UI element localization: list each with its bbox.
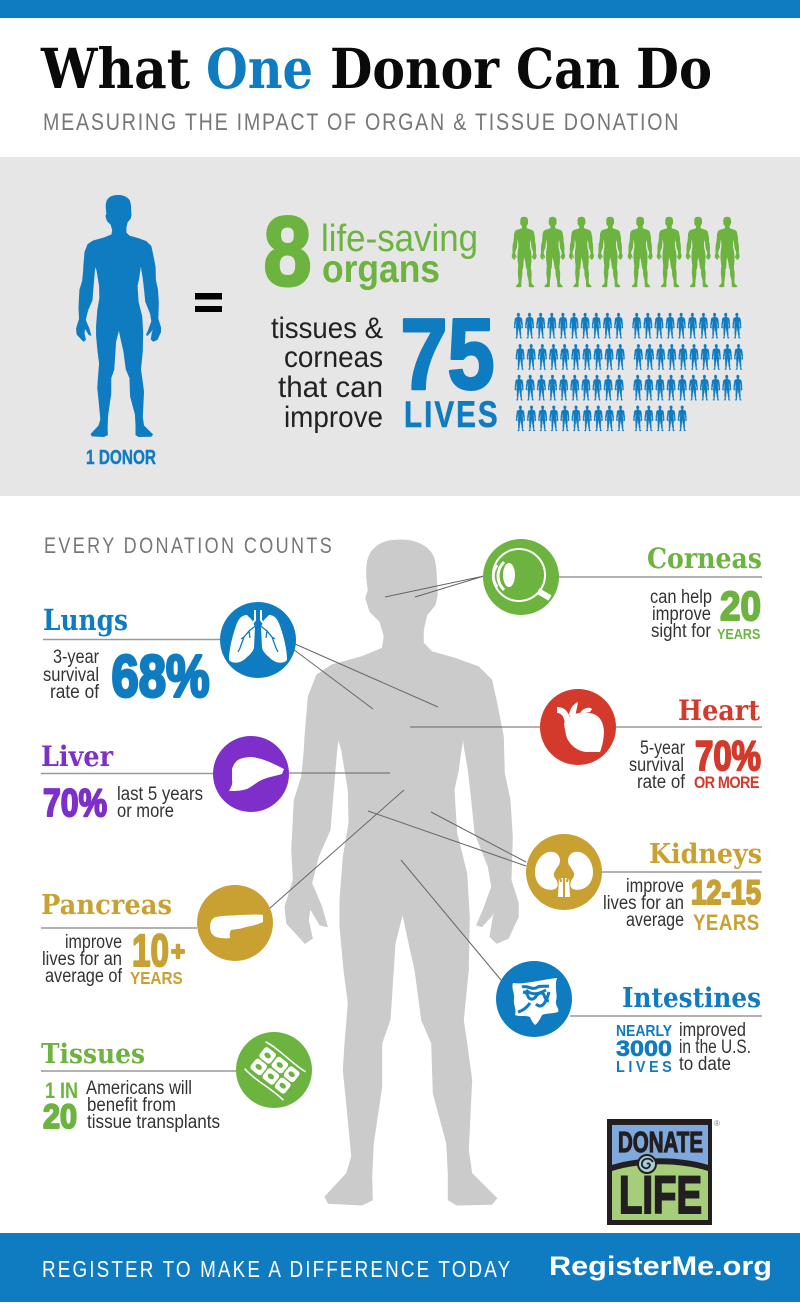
icon: tissue cells	[236, 1032, 312, 1108]
heading: Intestines	[622, 983, 761, 1014]
description: rate of	[637, 772, 686, 793]
description	[117, 784, 203, 822]
description	[42, 932, 123, 987]
stat: +	[171, 936, 185, 966]
description: average of	[45, 966, 123, 987]
heading: Pancreas	[41, 890, 172, 921]
description: improved	[679, 1020, 746, 1041]
description	[86, 1078, 220, 1133]
title: Can	[516, 36, 620, 101]
description	[650, 587, 712, 642]
stat: 20	[720, 583, 761, 629]
footer call to action: REGISTER TO MAKE A DIFFERENCE TODAY	[42, 1257, 510, 1282]
stat: 1 IN	[45, 1078, 78, 1103]
stat: 12-15	[691, 874, 761, 912]
description	[43, 647, 100, 703]
stat	[43, 1078, 78, 1136]
heading: Liver	[41, 740, 114, 773]
description: or more	[117, 801, 174, 822]
description: to date	[679, 1054, 731, 1075]
stat	[694, 732, 761, 792]
description: benefit from	[87, 1095, 176, 1116]
stat: 70%	[695, 732, 761, 779]
icon: pancreas	[197, 885, 273, 961]
title	[40, 36, 712, 101]
leader lines	[270, 576, 540, 980]
icon grid: 75 blue people	[514, 313, 743, 431]
title: Do	[636, 36, 712, 101]
stat text: tissues and corneas: that can	[278, 371, 383, 404]
stat text: tissues and corneas	[271, 312, 383, 434]
stat: OR MORE	[694, 774, 759, 792]
stat: 68%	[112, 644, 210, 710]
heading: Kidneys	[649, 839, 762, 870]
stat: 75 lives: 75	[400, 298, 494, 410]
stat: 20	[43, 1098, 77, 1136]
panel: corneas	[483, 539, 762, 642]
stat: 8 organs: 8	[264, 196, 312, 306]
panel: liver	[41, 736, 289, 825]
stat: LIVES	[616, 1058, 672, 1076]
panel: intestines	[496, 961, 762, 1076]
stat	[691, 874, 761, 935]
icon: lungs	[220, 602, 296, 678]
stat: 8 organs: organs	[322, 248, 440, 291]
stat: 70%	[43, 782, 107, 825]
description: improve	[626, 876, 684, 897]
description: rate of	[50, 682, 100, 703]
stat	[717, 583, 761, 642]
stat: YEARS	[130, 968, 183, 988]
stat	[616, 1023, 672, 1076]
panel: tissues	[41, 1032, 312, 1136]
panel: kidneys	[526, 834, 762, 935]
panel: lungs	[43, 602, 296, 710]
stat text: tissues and corneas: corneas	[284, 341, 383, 374]
icon: intestines	[496, 961, 572, 1037]
panel: pancreas	[41, 885, 273, 988]
icon: heart	[540, 689, 616, 765]
stat text: tissues and corneas: improve	[284, 401, 383, 434]
description: survival	[43, 665, 99, 686]
icon: liver	[213, 736, 289, 812]
stat: YEARS	[693, 912, 759, 935]
heading: Tissues	[41, 1039, 145, 1070]
panel: one donor equals	[0, 157, 800, 496]
stat: 8 organs	[264, 196, 478, 306]
logo: Donate Life: LIFE	[619, 1166, 702, 1225]
description: last 5 years	[117, 784, 203, 805]
description: tissue transplants	[87, 1112, 220, 1133]
title: One	[206, 36, 313, 101]
description: can help	[650, 587, 712, 608]
stat: 8 organs: life-saving	[321, 218, 478, 260]
footer URL: RegisterMe.org	[549, 1251, 772, 1281]
description: improve	[65, 932, 122, 953]
heading: Lungs	[43, 603, 128, 637]
description	[603, 876, 684, 931]
donor label: 1 DONOR	[86, 447, 156, 469]
stat: 10	[132, 925, 169, 976]
stat: 3000	[616, 1036, 672, 1061]
equals sign	[195, 293, 222, 312]
icon: donor silhouette	[76, 195, 161, 437]
panel: heart	[540, 689, 762, 793]
stat: NEARLY	[616, 1023, 672, 1040]
icon: kidneys	[526, 834, 602, 910]
stat text: tissues and corneas: tissues &	[271, 312, 383, 345]
heading: Corneas	[647, 542, 762, 575]
description: average	[626, 910, 684, 931]
logo: Donate Life	[607, 1119, 720, 1225]
description: in the U.S.	[679, 1037, 751, 1058]
heading: Heart	[678, 694, 760, 727]
description	[629, 738, 686, 793]
icon row: 8 green people	[512, 217, 739, 287]
stat: YEARS	[717, 625, 760, 642]
logo: Donate Life: ®	[714, 1119, 720, 1128]
description: 3-year	[53, 647, 100, 668]
description: Americans will	[86, 1078, 192, 1099]
description	[679, 1020, 751, 1075]
description: 5-year	[640, 738, 686, 759]
section heading: EVERY DONATION COUNTS	[44, 534, 332, 558]
description: sight for	[651, 621, 712, 642]
grey body silhouette	[285, 540, 518, 1205]
footer bar	[0, 1233, 800, 1302]
stat: 75 lives: LIVES	[404, 395, 498, 436]
description: lives for an	[42, 949, 122, 970]
description: improve	[652, 604, 711, 625]
subtitle: MEASURING THE IMPACT OF ORGAN & TISSUE DONATION	[43, 108, 678, 135]
logo: Donate Life: DONATE	[618, 1127, 703, 1159]
icon: eye	[483, 539, 559, 615]
top bar	[0, 0, 800, 18]
description: lives for an	[603, 893, 684, 914]
title: What	[40, 36, 191, 101]
description: survival	[629, 755, 684, 776]
title: Donor	[330, 36, 500, 101]
